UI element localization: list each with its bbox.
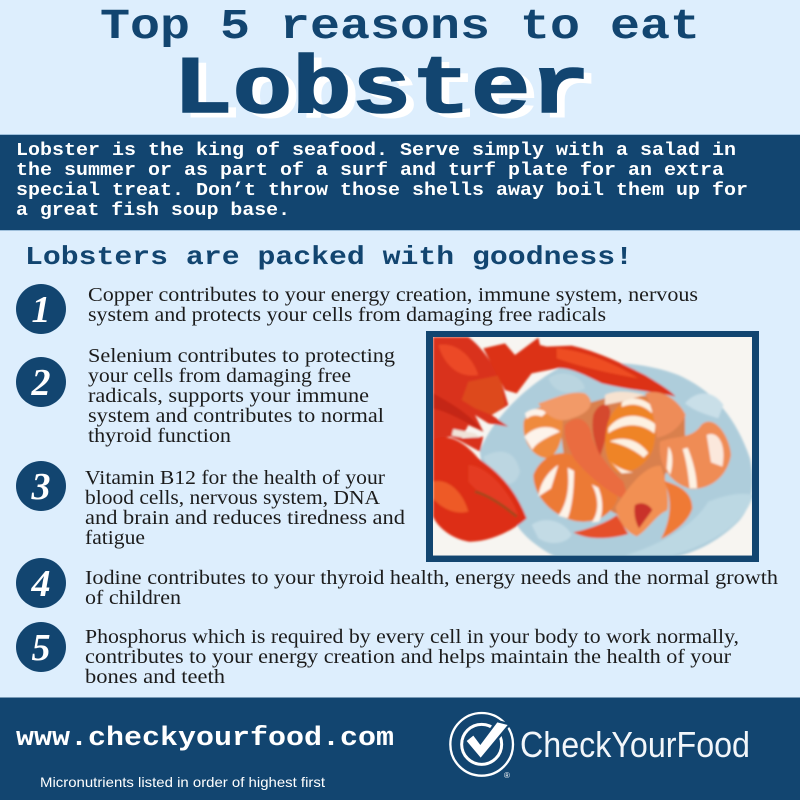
- logo: [450, 713, 750, 780]
- reason 3: blood cells, nervous system, DNA: [85, 487, 381, 509]
- reason 3: Vitamin B12 for the health of your: [85, 467, 385, 489]
- reason 3: 3: [30, 466, 50, 508]
- logo: CheckYourFood: [520, 724, 750, 765]
- reason 2: your cells from damaging free: [88, 365, 351, 387]
- section heading: Lobsters are packed with goodness!: [25, 242, 633, 272]
- title: [100, 2, 700, 142]
- intro band: Lobster is the king of seafood. Serve simply with a salad in: [16, 141, 736, 161]
- reason 3: [16, 461, 405, 549]
- footnote: Micronutrients listed in order of highest first: [40, 774, 325, 790]
- intro band: the summer or as part of a surf and turf plate for an extra: [16, 161, 724, 181]
- footer band: [0, 698, 800, 800]
- reason 3: fatigue: [85, 527, 145, 549]
- reason 1: Copper contributes to your energy creation, immune system, nervous: [88, 284, 698, 306]
- intro band: special treat. Don’t throw those shells away boil them up for: [16, 181, 748, 201]
- reason 2: system and contributes to normal: [88, 405, 384, 427]
- title: Top 5 reasons to eat: [100, 2, 700, 51]
- reason 2: radicals, supports your immune: [88, 385, 369, 407]
- reason 5: 5: [32, 627, 50, 669]
- reason 2: 2: [30, 362, 50, 404]
- reason 5: Phosphorus which is required by every cell in your body to work normally,: [85, 626, 739, 648]
- reason 3: and brain and reduces tiredness and: [85, 507, 405, 529]
- reason 4: of children: [85, 587, 181, 609]
- intro band: a great fish soup base.: [16, 201, 290, 221]
- title: Lobster: [173, 44, 590, 137]
- reason 1: 1: [32, 289, 50, 331]
- website url: www.checkyourfood.com: [16, 724, 394, 754]
- reason 4: Iodine contributes to your thyroid health, energy needs and the normal growth: [85, 567, 778, 589]
- reason 2: [16, 345, 395, 447]
- reason 2: Selenium contributes to protecting: [88, 345, 395, 367]
- lobster photo: [426, 331, 759, 562]
- reason 1: system and protects your cells from damaging free radicals: [88, 304, 606, 326]
- reason 5: [16, 622, 739, 688]
- intro band: [0, 134, 800, 231]
- reason 5: contributes to your energy creation and helps maintain the health of your: [85, 646, 731, 668]
- reason 5: bones and teeth: [85, 666, 225, 688]
- reason 1: [16, 284, 698, 334]
- reason 2: thyroid function: [88, 425, 231, 447]
- meat base: [558, 395, 685, 522]
- reason 4: [16, 558, 778, 609]
- reason 4: 4: [30, 563, 50, 605]
- logo: ®: [504, 771, 510, 780]
- title: Lobster: [181, 49, 598, 142]
